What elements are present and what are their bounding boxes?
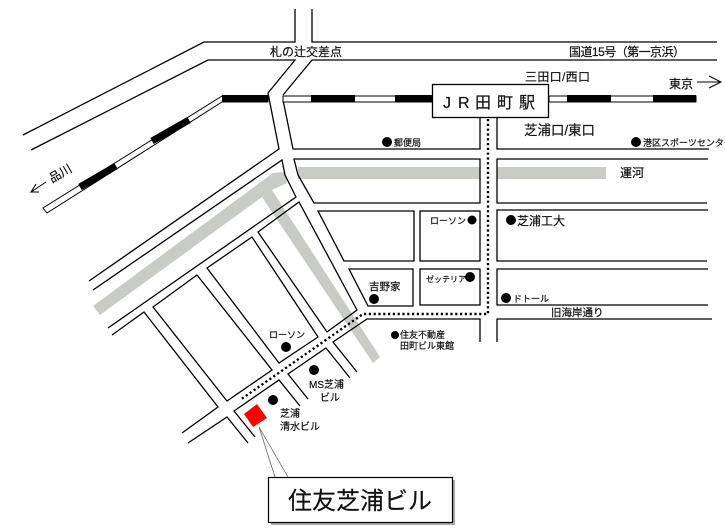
poi: Lawson north: ローソン (430, 216, 466, 226)
callout pointer (259, 427, 288, 477)
poi: post office: 郵便局 (394, 137, 421, 148)
railway: diagonal section (43, 95, 268, 213)
poi: Yoshinoya: 吉野家 (369, 280, 401, 293)
poi: post office (382, 137, 421, 148)
poi: Sumitomo Fudosan building (391, 329, 454, 351)
label: Tokyo with arrow: 東京 (669, 77, 693, 91)
poi: Zetteria: ゼッテリア (426, 274, 466, 284)
label: old coast road: 旧海岸通り (551, 306, 604, 319)
poi: MS Shibaura building: ビル (320, 392, 340, 404)
station box: JR Tamachi (432, 84, 548, 118)
poi: Zetteria (426, 272, 475, 284)
poi: Shibaura Shimizu building (268, 395, 320, 433)
poi: Shibaura Institute of Technology: 芝浦工大 (517, 214, 565, 228)
station box: JR Tamachi: JR田町駅 (443, 95, 535, 112)
label: east exit: 芝浦口/東口 (524, 123, 595, 138)
poi: Shibaura Shimizu building: 清水ビル (280, 420, 320, 433)
poi: Sumitomo Fudosan building: 田町ビル東館 (400, 340, 454, 351)
poi: Lawson south (269, 330, 305, 352)
label: canal: 運河 (620, 166, 644, 180)
label: Shinagawa with arrow (31, 161, 74, 192)
label: Tokyo with arrow (669, 76, 721, 91)
poi: Lawson south: ローソン (269, 330, 305, 340)
poi: MS Shibaura building: MS芝浦 (309, 378, 344, 391)
poi: Shibaura Shimizu building: 芝浦 (280, 407, 300, 420)
label: intersection: 札の辻交差点 (270, 45, 342, 59)
poi: Doutor: ドトール (513, 294, 549, 304)
callout: Sumitomo Shibaura building: 住友芝浦ビル (288, 488, 432, 515)
callout: Sumitomo Shibaura building (268, 478, 455, 525)
label: west exit: 三田口/西口 (525, 70, 590, 84)
railway: horizontal section (283, 95, 696, 102)
road network (23, 9, 717, 443)
dotted walking route (240, 119, 488, 400)
poi: Yoshinoya (369, 280, 401, 304)
canal gray bands (93, 167, 606, 363)
marker: target building (244, 404, 267, 427)
poi: MS Shibaura building (309, 365, 344, 404)
label: Shinagawa with arrow: 品川 (46, 161, 74, 186)
label: route 15: 国道15号（第一京浜） (569, 45, 685, 59)
poi: Doutor (501, 293, 549, 304)
poi: Sumitomo Fudosan building: 住友不動産 (400, 329, 445, 340)
